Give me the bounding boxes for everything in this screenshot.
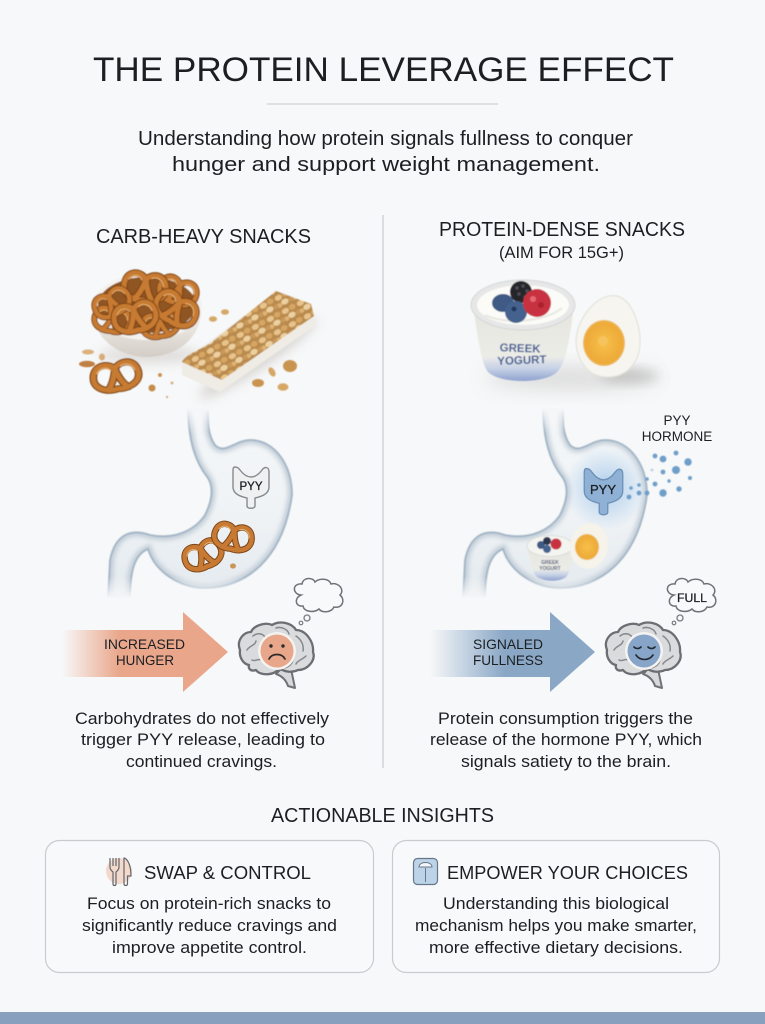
footer band	[0, 1012, 765, 1024]
brain with calm face	[606, 623, 681, 688]
illustration: greek yogurt and boiled egg: GREEK	[499, 342, 541, 356]
illustration: greek yogurt and boiled egg	[471, 280, 660, 388]
card text: mechanism helps you make smarter,	[415, 917, 697, 935]
mini yogurt and egg in stomach: YOGURT	[539, 566, 561, 572]
subtitle: hunger and support weight management.	[172, 154, 600, 176]
arrow: increased hunger: HUNGER	[116, 652, 174, 668]
panel: carb-heavy snacks	[62, 226, 343, 771]
card text: more effective dietary decisions.	[429, 939, 683, 957]
description: protein-dense	[430, 709, 702, 771]
description: protein-dense: signals satiety to the brain.	[461, 752, 671, 771]
title: THE PROTEIN LEVERAGE EFFECT	[93, 51, 674, 89]
illustration: pretzels and granola bar	[79, 271, 322, 405]
mini yogurt and egg in stomach	[527, 520, 612, 581]
stomach with pretzels	[108, 405, 292, 600]
card heading: EMPOWER YOUR CHOICES	[447, 863, 688, 883]
stomach with yogurt, egg and active PYY	[463, 405, 648, 600]
stomach with pretzels: PYY	[239, 481, 263, 493]
thought bubble: full	[667, 578, 716, 625]
arrow: signaled fullness: SIGNALED	[473, 636, 543, 652]
arrow: increased hunger: INCREASED	[104, 636, 185, 652]
arrow: increased hunger	[62, 612, 228, 692]
PYY hormone label: PYY	[663, 413, 691, 428]
description: carb-heavy: continued cravings.	[126, 752, 277, 771]
panel: protein-dense snacks	[430, 219, 716, 771]
card: swap and control	[46, 840, 374, 972]
subtitle	[138, 128, 633, 176]
stomach with yogurt, egg and active PYY: PYY	[590, 482, 616, 497]
heading: carb-heavy snacks: CARB-HEAVY SNACKS	[96, 226, 311, 248]
description: protein-dense: Protein consumption triggers the	[438, 709, 693, 728]
description: protein-dense: release of the hormone PYY, which	[430, 730, 702, 749]
description: carb-heavy: trigger PYY release, leading to	[81, 730, 325, 749]
description: carb-heavy: Carbohydrates do not effectively	[75, 709, 330, 728]
heading: actionable insights: ACTIONABLE INSIGHTS	[271, 805, 494, 827]
card: empower your choices	[392, 840, 720, 972]
heading: protein-dense snacks: PROTEIN-DENSE SNACKS	[439, 219, 685, 241]
thought bubble: full: FULL	[677, 591, 707, 605]
icon: fork and knife	[106, 858, 132, 886]
card text: Understanding this biological	[443, 895, 669, 913]
arrow: signaled fullness: FULLNESS	[473, 652, 543, 668]
card text	[415, 895, 697, 957]
thought bubble: empty	[294, 578, 343, 625]
illustration: greek yogurt and boiled egg: YOGURT	[497, 354, 547, 368]
icon: weighing scale	[414, 858, 438, 884]
card text	[82, 895, 337, 957]
description: carb-heavy	[75, 709, 330, 771]
arrow: signaled fullness	[430, 612, 595, 692]
heading: protein-dense snacks	[439, 219, 685, 262]
card text: improve appetite control.	[112, 939, 307, 957]
PYY hormone label	[642, 413, 712, 444]
brain with sad face	[239, 623, 314, 688]
card heading: SWAP & CONTROL	[144, 863, 311, 883]
card text: Focus on protein-rich snacks to	[87, 895, 331, 913]
subtitle: Understanding how protein signals fullness to conquer	[138, 128, 633, 150]
PYY hormone particles	[627, 451, 692, 499]
card text: significantly reduce cravings and	[82, 917, 337, 935]
PYY hormone label: HORMONE	[642, 429, 712, 444]
heading: protein-dense snacks: (AIM FOR 15G+)	[499, 244, 624, 262]
mini yogurt and egg in stomach: GREEK	[541, 560, 559, 566]
